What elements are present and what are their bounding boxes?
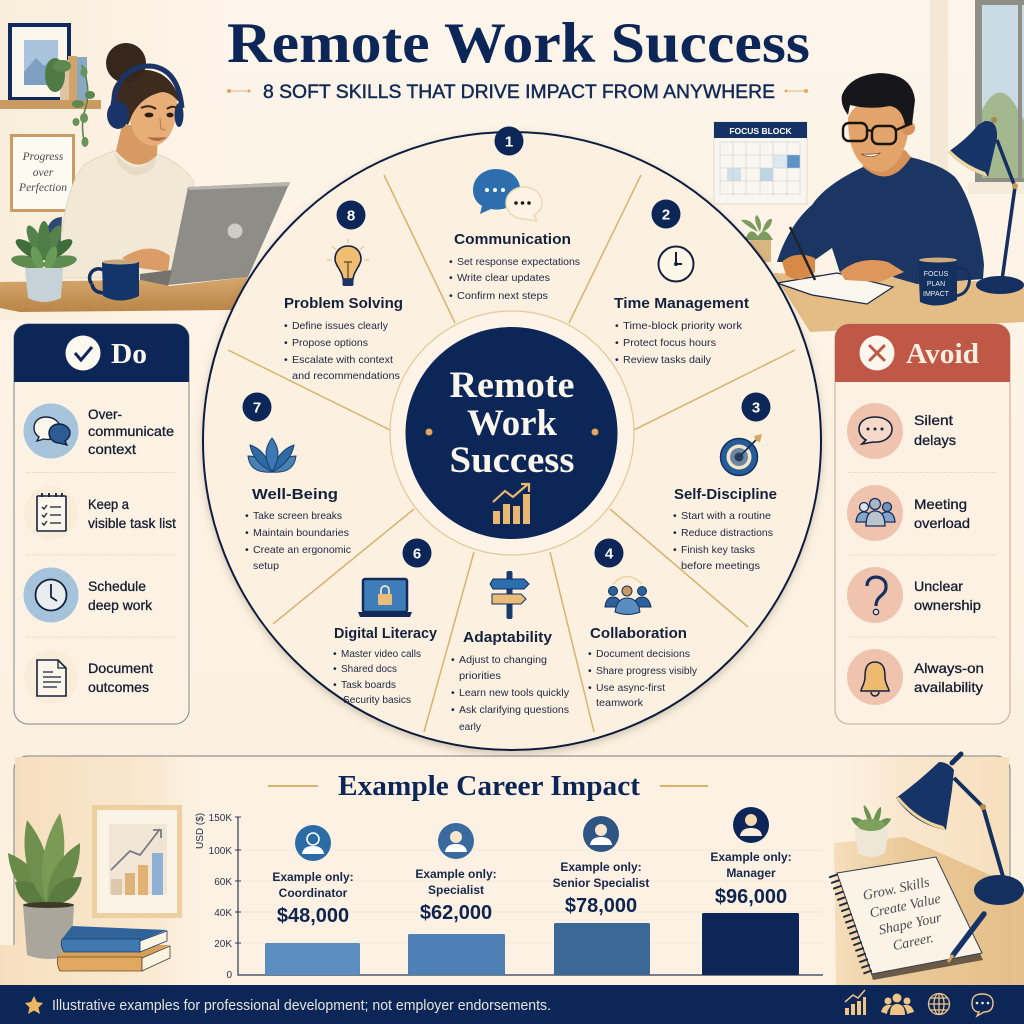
skill 6: Digital Literacy: Digital Literacy	[334, 625, 438, 642]
bar: Senior Specialist: $78,000	[565, 895, 637, 917]
skill 8: Problem Solving: Problem Solving	[284, 295, 403, 312]
skill 4: Collaboration: 4	[605, 546, 614, 562]
skill 4: Collaboration: •	[588, 682, 592, 694]
icon: growth chart	[493, 484, 530, 524]
bar: Specialist: Example only:	[415, 867, 497, 881]
neck and head	[862, 150, 911, 176]
skill 4: Collaboration: Document decisions	[596, 648, 690, 660]
Do header: Do	[111, 338, 147, 370]
icon: laptop with padlock	[358, 579, 412, 617]
Do item: document outcomes: Document	[88, 660, 153, 676]
Avoid item: silent delays	[847, 403, 956, 459]
icon: star	[25, 996, 43, 1014]
skill 1: Communication: Communication	[454, 231, 571, 248]
bar: Specialist: Specialist	[428, 883, 484, 897]
Do item: keep a visible task list	[24, 486, 176, 540]
skill 3: Self-Discipline: •	[673, 527, 677, 539]
window	[968, 0, 1024, 194]
wall calendar: Focus Block	[714, 122, 807, 204]
chart axes: 40K	[214, 908, 232, 919]
Focus Plan Impact mug: FOCUS	[924, 271, 949, 278]
center hub: Success	[450, 440, 574, 481]
chart axes: 60K	[214, 877, 232, 888]
skill 1: Communication: Write clear updates	[457, 272, 550, 284]
skill 7: Well-Being: •	[245, 544, 249, 556]
Avoid item: meeting overload	[847, 485, 970, 541]
skill 6: Digital Literacy: Task boards	[341, 679, 396, 691]
small plant	[741, 215, 773, 262]
skill 2: Time Management: •	[615, 320, 619, 332]
illustration: succulent	[851, 805, 891, 857]
subtitle: 8 SOFT SKILLS THAT DRIVE IMPACT FROM ANYWHERE	[263, 81, 775, 103]
skill 2: Time Management: Time Management	[614, 295, 749, 312]
skill 4: Collaboration	[588, 538, 698, 709]
smile	[861, 153, 880, 157]
skill 5: Adaptability: •	[451, 654, 455, 666]
Do header	[14, 324, 189, 382]
chart axes: 0	[226, 970, 232, 981]
framed picture	[8, 23, 71, 100]
disclaimer text: Illustrative examples for professional development; not employer endorsements.	[52, 998, 551, 1014]
laptop	[168, 182, 290, 285]
skill 1: Communication: •	[449, 256, 453, 268]
skill 5: Adaptability: •	[451, 687, 455, 699]
Do item: over-communicate context: context	[88, 441, 136, 457]
skill 1: Communication: Confirm next steps	[457, 290, 548, 302]
poster: Progress over Perfection: over	[33, 167, 54, 179]
skill 2: Time Management: 2	[662, 206, 670, 224]
Avoid header: Avoid	[906, 338, 979, 370]
chart axes: 100K	[209, 846, 232, 857]
skill 3: Self-Discipline: Finish key tasks	[681, 544, 755, 556]
navy mug	[90, 260, 139, 300]
skill 5: Adaptability: Adaptability	[463, 629, 553, 646]
bar: Manager	[702, 807, 799, 975]
illustration: man writing at desk	[714, 0, 1024, 332]
panel: Example Career Impact	[0, 754, 1024, 985]
skill 8: Problem Solving: Escalate with context	[292, 354, 393, 366]
skill 7: Well-Being	[242, 392, 351, 572]
Do item: over-communicate context	[24, 404, 174, 458]
skill 6: Digital Literacy: Shared docs	[341, 663, 397, 675]
Avoid header	[835, 324, 1010, 382]
skill 5: Adaptability: Ask clarifying questions	[459, 704, 569, 716]
skill 6: Digital Literacy: •	[333, 648, 337, 660]
wall column	[930, 0, 948, 320]
skill 7: Well-Being: •	[245, 510, 249, 522]
hands and pen	[782, 255, 815, 279]
skill 6: Digital Literacy: Master video calls	[341, 648, 421, 660]
footer bar	[0, 985, 1024, 1024]
icon: target	[720, 434, 762, 476]
neck and face	[116, 125, 158, 165]
icon: team	[605, 576, 651, 614]
title: Remote Work Success	[227, 12, 810, 75]
skill 5: Adaptability: Adjust to changing	[459, 654, 547, 666]
skill 3: Self-Discipline: Reduce distractions	[681, 527, 773, 539]
Do item: keep a visible task list: Keep a	[88, 496, 129, 512]
bar: Senior Specialist: Senior Specialist	[553, 876, 649, 890]
illustration: potted plant	[0, 813, 180, 985]
skill 1: Communication	[449, 126, 580, 302]
panel: Do	[14, 324, 189, 724]
skill 6: Digital Literacy: •	[333, 663, 337, 675]
right scene backdrop	[815, 757, 1009, 985]
sweater	[777, 157, 984, 284]
skill 1: Communication: •	[449, 290, 453, 302]
skill 4: Collaboration: Use async-first	[596, 682, 665, 694]
Do item: schedule deep work: deep work	[88, 597, 153, 613]
skill 8: Problem Solving: •	[284, 354, 288, 366]
Avoid item: always-on availability	[847, 649, 984, 705]
illustration: lamp	[896, 754, 1024, 905]
skill 2: Time Management: •	[615, 354, 619, 366]
icon: growth	[845, 990, 866, 1015]
skill 7: Well-Being: Create an ergonomic	[253, 544, 351, 556]
skill 5: Adaptability: early	[459, 721, 482, 733]
Focus Plan Impact mug: PLAN	[927, 281, 945, 288]
Focus Plan Impact mug: IMPACT	[923, 291, 950, 298]
skill 3: Self-Discipline: Start with a routine	[681, 510, 771, 522]
hand	[122, 248, 170, 272]
Avoid item: meeting overload: Meeting	[914, 496, 967, 512]
footer icons	[845, 990, 993, 1016]
wall calendar: Focus Block: FOCUS BLOCK	[729, 126, 793, 136]
skill 1: Communication: •	[449, 272, 453, 284]
illustration: spiral notebook	[833, 857, 984, 980]
center hub	[406, 327, 618, 539]
bar: Coordinator	[265, 825, 360, 975]
skill 5: Adaptability: Learn new tools quickly	[459, 687, 570, 699]
skill 6: Digital Literacy: Security basics	[343, 694, 411, 706]
skill 2: Time Management: Protect focus hours	[623, 337, 716, 349]
skill 7: Well-Being: •	[245, 527, 249, 539]
glasses	[843, 123, 910, 144]
Avoid item: silent delays: Silent	[914, 412, 953, 428]
chart axes	[195, 813, 823, 981]
icon: people	[881, 994, 914, 1015]
skill 3: Self-Discipline: •	[673, 510, 677, 522]
skill 4: Collaboration: •	[588, 665, 592, 677]
icon: clock	[658, 246, 694, 282]
skill 4: Collaboration: teamwork	[596, 697, 644, 709]
chair back	[46, 217, 62, 250]
skill 8: Problem Solving: 8	[347, 208, 355, 224]
skill 3: Self-Discipline: Self-Discipline	[674, 486, 777, 503]
shelf with books and vine	[0, 56, 101, 147]
open notebook	[777, 273, 893, 304]
Do item: over-communicate context: communicate	[88, 423, 174, 439]
Do item: keep a visible task list: visible task list	[88, 515, 176, 531]
skill 3: Self-Discipline: 3	[752, 400, 760, 416]
desk	[0, 277, 248, 312]
Avoid item: unclear ownership: Unclear	[914, 578, 963, 594]
bar: Senior Specialist	[553, 816, 650, 975]
skill 2: Time Management: Review tasks daily	[623, 354, 712, 366]
skill 8: Problem Solving: and recommendations	[292, 370, 400, 382]
desk	[773, 273, 1024, 332]
skill 4: Collaboration: Share progress visibly	[596, 665, 698, 677]
skill 4: Collaboration: •	[588, 648, 592, 660]
bar: Manager: Example only:	[710, 850, 792, 864]
skill 8: Problem Solving: •	[284, 320, 288, 332]
bar: Manager: Manager	[726, 866, 776, 880]
skill 1: Communication: 1	[505, 134, 513, 150]
illustration: stacked books	[57, 926, 170, 971]
skill 8: Problem Solving: Define issues clearly	[292, 320, 389, 332]
poster: Progress over Perfection	[10, 134, 75, 212]
skill 3: Self-Discipline	[673, 392, 777, 572]
left scene backdrop	[15, 757, 205, 985]
bar: Senior Specialist: Example only:	[560, 860, 642, 874]
illustration: framed growth chart	[92, 805, 182, 918]
Do item: document outcomes: outcomes	[88, 679, 149, 695]
chart axes: USD ($)	[195, 813, 206, 849]
illustration: spiral notebook: Create Value	[868, 892, 942, 921]
skill 8: Problem Solving: Propose options	[292, 337, 368, 349]
center hub: Work	[467, 403, 557, 444]
skill 3: Self-Discipline: •	[673, 544, 677, 556]
icon: chat bubbles	[473, 169, 542, 221]
Avoid item: silent delays: delays	[914, 432, 956, 448]
skill 7: Well-Being: 7	[253, 400, 261, 416]
skill 7: Well-Being: Take screen breaks	[253, 510, 342, 522]
bar chart: salary examples	[195, 807, 823, 981]
skill 7: Well-Being: Maintain boundaries	[253, 527, 349, 539]
skill 4: Collaboration: Collaboration	[590, 625, 687, 642]
section heading: Example Career Impact	[338, 770, 640, 802]
Do item: schedule deep work: Schedule	[88, 578, 146, 594]
Avoid item: always-on availability: Always-on	[914, 660, 984, 676]
Avoid item: meeting overload: overload	[914, 515, 970, 531]
bar: Coordinator: Coordinator	[279, 886, 348, 900]
inner ring	[390, 311, 634, 555]
skill 2: Time Management: Time-block priority work	[623, 320, 743, 332]
hair	[842, 73, 915, 125]
chart axes: 20K	[214, 939, 232, 950]
skill 2: Time Management	[614, 200, 749, 366]
skill 6: Digital Literacy: 6	[413, 546, 421, 562]
chart axes: 150K	[209, 813, 232, 824]
poster: Progress over Perfection: Perfection	[18, 182, 67, 194]
hair	[112, 70, 181, 125]
Do item: schedule deep work	[24, 568, 153, 622]
skill 8: Problem Solving: •	[284, 337, 288, 349]
skill 7: Well-Being: setup	[253, 560, 279, 572]
poster: Progress over Perfection: Progress	[22, 151, 64, 163]
bar: Specialist	[408, 823, 505, 975]
center hub: Remote	[450, 365, 574, 406]
skill 1: Communication: Set response expectations	[457, 256, 580, 268]
icon: lotus	[248, 438, 296, 472]
potted plant	[10, 221, 78, 302]
illustration: spiral notebook: Career.	[892, 931, 935, 954]
skill 6: Digital Literacy: •	[333, 679, 337, 691]
desk lamp	[948, 117, 1024, 294]
skill 5: Adaptability	[451, 571, 570, 733]
headphones	[113, 66, 182, 108]
skill 7: Well-Being: Well-Being	[252, 486, 338, 503]
Focus Plan Impact mug	[918, 258, 970, 306]
bar: Manager: $96,000	[715, 886, 787, 908]
skill 3: Self-Discipline: before meetings	[681, 560, 760, 572]
skill 5: Adaptability: •	[451, 704, 455, 716]
Avoid item: unclear ownership	[847, 567, 981, 623]
panel: Avoid	[835, 324, 1010, 724]
icon: light bulb	[327, 239, 369, 286]
wheel: eight soft skills	[203, 126, 821, 750]
wheel spokes	[228, 175, 795, 732]
illustration: spiral notebook: Shape Your	[878, 911, 944, 939]
illustration: spiral notebook: Grow. Skills	[862, 875, 931, 904]
Do item: document outcomes	[24, 650, 153, 704]
illustration: woman at laptop	[0, 0, 290, 320]
bar: Coordinator: $48,000	[277, 905, 349, 927]
icon: signpost	[490, 571, 529, 619]
facial features	[141, 106, 177, 109]
icon: chat	[972, 994, 993, 1016]
icon: globe	[928, 994, 950, 1014]
Avoid item: unclear ownership: ownership	[914, 597, 981, 613]
Avoid item: always-on availability: availability	[914, 679, 983, 695]
bar: Coordinator: Example only:	[272, 870, 354, 884]
skill 6: Digital Literacy	[333, 538, 438, 706]
skill 2: Time Management: •	[615, 337, 619, 349]
Do item: over-communicate context: Over-	[88, 406, 122, 422]
skill 8: Problem Solving	[284, 200, 403, 382]
skill 5: Adaptability: priorities	[459, 670, 501, 682]
illustration: right desk	[834, 837, 1024, 985]
bar: Specialist: $62,000	[420, 902, 492, 924]
sweater	[60, 151, 194, 278]
